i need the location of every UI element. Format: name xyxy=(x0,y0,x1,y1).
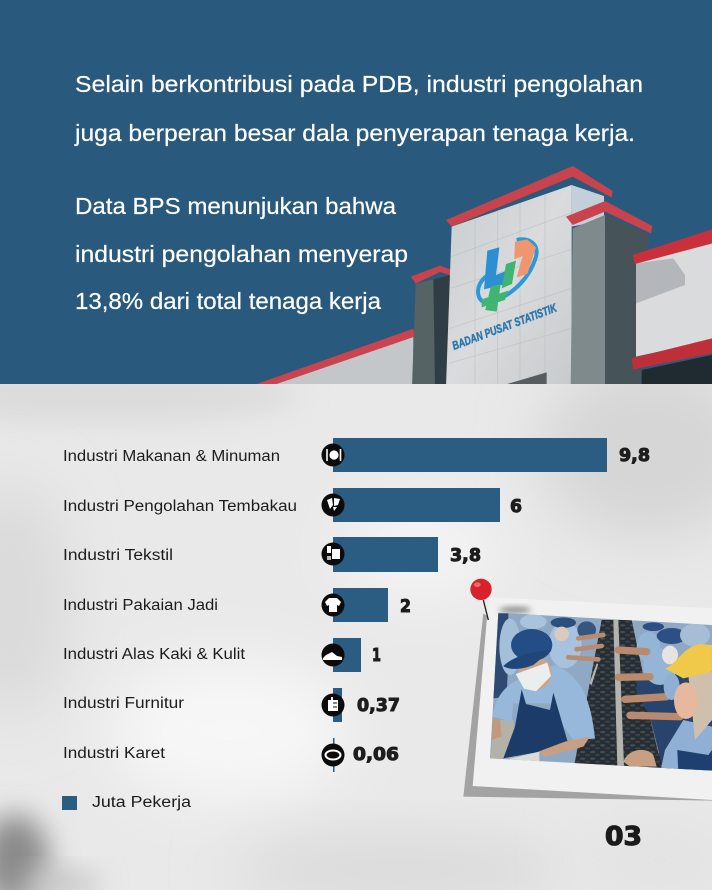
pinned factory photo xyxy=(463,579,712,801)
main tower front xyxy=(446,185,572,387)
row: karet: 0,06 xyxy=(353,745,399,765)
background workers left xyxy=(493,613,508,698)
row: furnitur xyxy=(63,688,400,722)
header panel xyxy=(0,0,712,384)
row: pakaian jadi: Industri Pakaian Jadi xyxy=(63,597,218,614)
row: karet: Industri Karet xyxy=(63,745,166,762)
building sign text: BADAN PUSAT STATISTIK xyxy=(450,300,560,353)
intro text: juga berperan besar dala penyerapan tenaga kerja. xyxy=(74,120,635,146)
right wing xyxy=(636,243,712,357)
row: makanan minuman: 9,8 xyxy=(619,446,650,466)
row: pakaian jadi: 2 xyxy=(400,597,411,617)
logo xyxy=(478,239,537,312)
background workers right xyxy=(636,672,712,770)
row: tekstil: Industri Tekstil xyxy=(63,547,173,564)
BPS data text: Data BPS menunjukan bahwa xyxy=(75,193,396,219)
row: tekstil: 3,8 xyxy=(450,546,481,566)
bar chart: workers by industry xyxy=(63,438,650,772)
main cornice xyxy=(446,166,613,227)
small tower xyxy=(412,275,450,387)
intro text: Selain berkontribusi pada PDB, industri pengolahan xyxy=(75,71,643,97)
row: tembakau: 6 xyxy=(510,497,522,517)
row: makanan minuman: Industri Makanan & Minuman xyxy=(63,448,280,465)
main tower side xyxy=(572,185,604,227)
row: furnitur: Industri Furnitur xyxy=(63,695,184,712)
intro text xyxy=(74,71,643,146)
row: karet xyxy=(63,738,399,772)
row: makanan minuman xyxy=(63,438,650,472)
left low wing xyxy=(276,337,414,384)
row: alas kaki kulit: 1 xyxy=(372,646,381,666)
legend: Juta Pekerja xyxy=(92,794,191,811)
factory workers photo xyxy=(483,610,712,773)
BPS data text: 13,8% dari total tenaga kerja xyxy=(75,288,381,314)
frame shadow xyxy=(463,613,712,801)
conveyor xyxy=(573,620,663,770)
legend xyxy=(62,794,191,811)
foreground woman xyxy=(660,720,712,773)
row: tembakau xyxy=(63,488,522,522)
building photo illustration xyxy=(257,166,712,387)
BPS data text: industri pengolahan menyerap xyxy=(75,241,408,267)
pin needle xyxy=(483,600,488,620)
row: furnitur: 0,37 xyxy=(357,696,400,716)
foreground man xyxy=(491,720,517,758)
row: alas kaki kulit xyxy=(63,638,381,672)
BPS data text xyxy=(75,193,408,314)
row: alas kaki kulit: Industri Alas Kaki & Kulit xyxy=(63,646,246,663)
page number: 03 xyxy=(605,822,642,852)
light cloudy background xyxy=(0,360,712,890)
row: pakaian jadi xyxy=(63,588,411,622)
row: tembakau: Industri Pengolahan Tembakau xyxy=(63,498,297,515)
red pin head xyxy=(470,579,492,600)
white photo frame xyxy=(473,597,712,800)
row: tekstil xyxy=(63,537,481,572)
right tower xyxy=(571,215,605,387)
